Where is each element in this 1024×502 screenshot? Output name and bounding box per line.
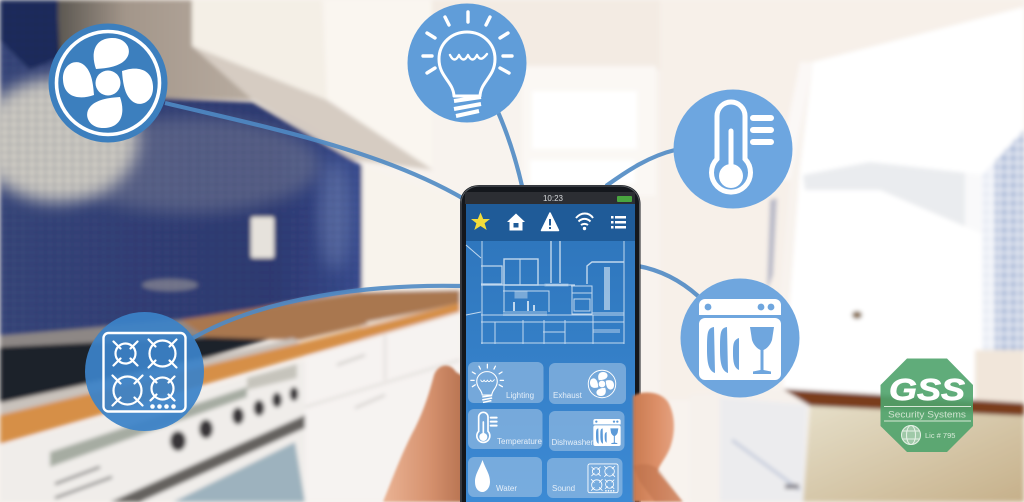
icon: dishwasher circle <box>680 278 800 398</box>
card: exhaust <box>549 363 626 404</box>
phone body <box>460 185 640 502</box>
status bar: 10:23 <box>543 194 564 203</box>
icon: fan circle <box>48 24 168 142</box>
icon: stove circle <box>85 312 204 431</box>
app header <box>466 204 635 241</box>
icon: light bulb circle <box>408 4 526 122</box>
icon: home <box>507 214 525 230</box>
card: water: Water <box>496 484 517 493</box>
icon: star <box>471 212 490 230</box>
badge: GSS Security Systems: Lic # 795 <box>925 431 955 440</box>
badge: GSS Security Systems: GSS <box>889 372 965 407</box>
hand: thumb <box>383 366 466 502</box>
icon: globe <box>902 426 920 444</box>
card: temperature: Temperature <box>497 437 542 446</box>
hand: fingers <box>633 392 683 502</box>
card: dishwasher: Dishwasher <box>552 438 594 447</box>
screen <box>466 204 635 502</box>
card: sound: Sound <box>552 484 575 493</box>
connector lines <box>165 103 698 338</box>
card: sound <box>547 458 622 498</box>
icon: wifi <box>576 214 593 230</box>
card: exhaust: Exhaust <box>553 391 583 400</box>
badge: GSS Security Systems: Security Systems <box>888 410 967 420</box>
icon: warning <box>542 213 558 230</box>
kitchen blueprint <box>466 241 624 344</box>
badge: GSS Security Systems <box>880 358 973 452</box>
icon: thermometer circle <box>674 90 792 208</box>
icon: list <box>611 216 626 228</box>
phone <box>460 185 640 502</box>
card: temperature <box>468 409 542 449</box>
card: water <box>468 457 542 497</box>
card: lighting <box>468 362 544 403</box>
card: dishwasher <box>549 411 624 451</box>
status bar <box>465 192 635 204</box>
card: lighting: Lighting <box>506 391 534 400</box>
